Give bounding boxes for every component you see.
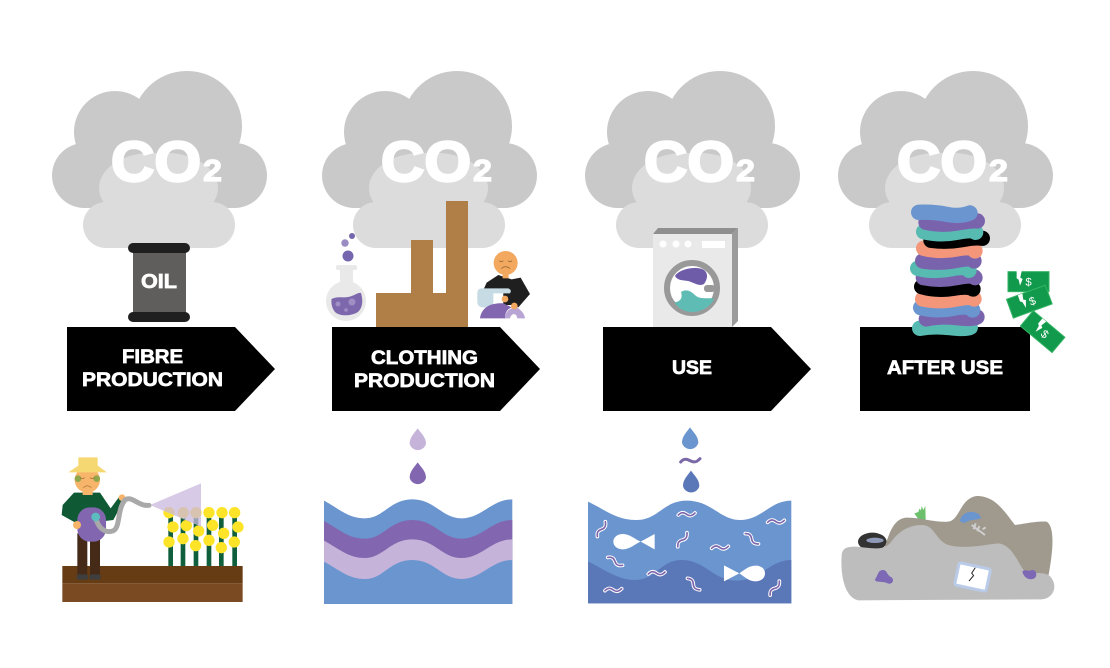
banner: clothing production: PRODUCTION [354,371,495,392]
icon: oil barrel [128,243,190,322]
cloud: fibre production CO2: 2 [203,153,222,188]
illustration: polluted water with dye [324,428,512,604]
banner: after use: AFTER USE [887,358,1003,379]
icon: torn money [1006,271,1065,353]
water base [324,499,512,604]
farmer tank [77,507,106,542]
cloud: after use CO2: 2 [989,153,1008,188]
banner: fibre production: FIBRE [122,347,183,368]
water drop dark [683,471,699,492]
icon: washing machine [653,228,738,327]
banner: use: USE [672,358,712,379]
tyre [858,533,887,551]
icon: oil barrel: OIL [141,271,177,293]
cloud: clothing production CO2: CO [381,130,471,194]
farmer hands [73,488,125,529]
cloud: clothing production CO2 [322,71,537,248]
cloud: fibre production CO2 [52,71,267,248]
farmer legs [77,533,101,580]
fish bone [972,523,986,535]
farmer head [75,467,100,493]
pesticide spray [150,483,201,527]
banner: fibre production [67,327,275,411]
banner: fibre production: PRODUCTION [82,370,223,391]
microfibre strand [681,459,700,462]
icon: flask with bubbles [326,233,366,321]
banner: clothing production [332,327,540,411]
lower water [588,560,791,603]
illustration: farmer spraying crops [62,457,244,602]
farmer shirt [62,493,124,525]
hose connector [91,513,100,521]
front heap [841,525,1054,600]
lilac dye band [324,539,512,604]
hose [96,499,149,532]
icon: sewing worker [477,251,530,318]
purple dye drop [410,462,426,484]
purple dye band [324,520,512,604]
cloud: after use CO2 [838,71,1053,248]
illustration: landfill [841,496,1054,600]
blue blob [960,512,981,523]
banner: use [603,327,811,411]
purple blob right [1022,570,1036,579]
soil [62,566,243,602]
cloud: clothing production CO2: 2 [473,153,492,188]
grass [914,506,926,520]
yellow flowers [163,507,244,553]
lilac dye drop [410,428,426,450]
broken screen [955,563,991,591]
back heap [885,496,1052,583]
purple blob left [875,570,893,584]
illustration: water with microfibres and fish [588,427,791,603]
icon: factory [376,201,468,327]
fish left [613,534,655,549]
upper water [588,501,791,603]
fish right [724,565,765,581]
banner: after use [860,327,1030,411]
microfibres [596,513,784,596]
cloud: after use CO2: CO [897,130,987,194]
crop stems [168,517,237,566]
banknote two: $ [1028,295,1038,309]
lower water [324,560,512,604]
cloud: fibre production CO2: CO [111,130,201,194]
icon: clothes pile [918,212,982,329]
banknote one: $ [1025,277,1032,289]
banner: clothing production: CLOTHING [371,348,478,369]
banknote three: $ [1038,328,1051,342]
cloud: use CO2: 2 [736,153,755,188]
cloud: use CO2 [585,71,800,248]
farmer hat [68,457,107,472]
cloud: use CO2: CO [644,130,734,194]
water drop [682,427,698,449]
